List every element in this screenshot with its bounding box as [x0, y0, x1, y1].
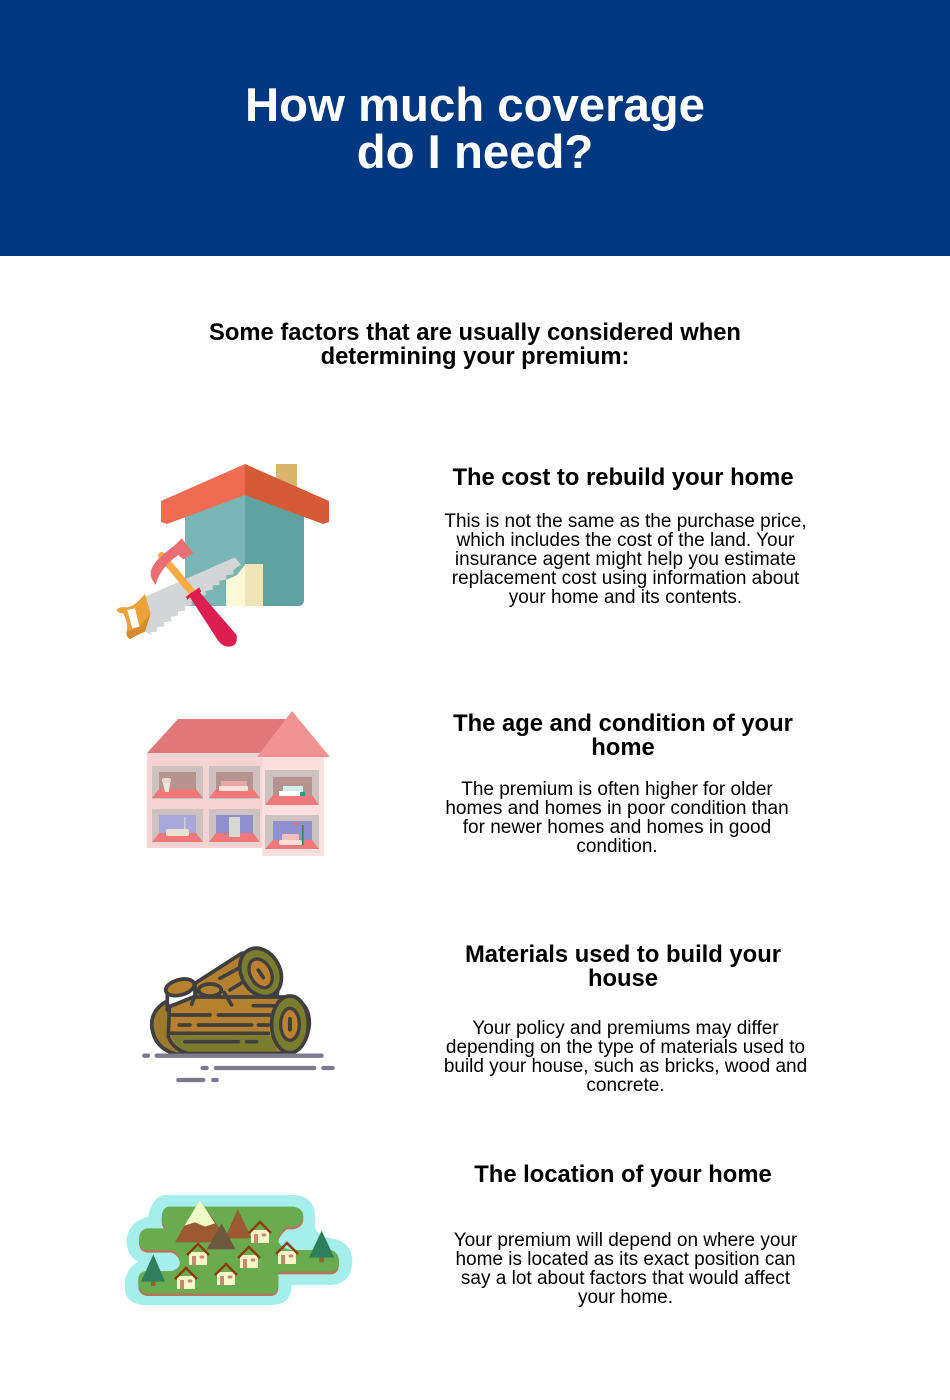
subheading — [209, 319, 741, 370]
factor 2 text: homes and homes in poor condition than — [445, 798, 789, 819]
factor 3 heading — [465, 941, 781, 992]
factor 3 heading: Materials used to build your — [465, 941, 781, 968]
header banner — [0, 0, 950, 256]
factor 1 text — [444, 511, 807, 608]
icon: wooden logs — [144, 941, 333, 1080]
factor 2 heading: home — [591, 734, 655, 761]
factor 2 text: condition. — [576, 836, 658, 857]
factor 1 text: your home and its contents. — [509, 587, 742, 608]
icon: house with hammer and saw — [117, 464, 329, 647]
subheading: determining your premium: — [321, 343, 629, 370]
factor 2 text — [445, 779, 789, 857]
subheading: Some factors that are usually considered when — [209, 319, 741, 346]
factor 2 heading — [453, 710, 793, 761]
icon: cutaway house with rooms — [147, 711, 330, 856]
factor 4 text — [454, 1230, 797, 1308]
factor 1 text: which includes the cost of the land. Your — [456, 530, 794, 551]
village houses — [175, 1222, 298, 1289]
factor 1 text: replacement cost using information about — [452, 568, 799, 589]
icon: island village — [125, 1195, 352, 1305]
factor 4 text: your home. — [578, 1287, 673, 1308]
factor 2 text: for newer homes and homes in good — [463, 817, 771, 838]
factor 4 text: Your premium will depend on where your — [454, 1230, 797, 1251]
factor 3 text: build your house, such as bricks, wood and — [444, 1056, 807, 1077]
factor 3 text: concrete. — [586, 1075, 665, 1096]
factor 4 heading: The location of your home — [474, 1161, 772, 1188]
factor 1 text: This is not the same as the purchase price, — [444, 511, 807, 532]
factor 3 text: depending on the type of materials used to — [446, 1037, 805, 1058]
title: How much coverage — [245, 79, 705, 132]
title: do I need? — [357, 126, 593, 179]
factor 3 text: Your policy and premiums may differ — [472, 1018, 779, 1039]
factor 2 text: The premium is often higher for older — [461, 779, 773, 800]
factor 4 text: say a lot about factors that would affect — [461, 1268, 790, 1289]
factor 4 text: home is located as its exact position can — [455, 1249, 796, 1270]
title — [245, 79, 705, 179]
factor 1 heading: The cost to rebuild your home — [452, 464, 794, 491]
factor 2 heading: The age and condition of your — [453, 710, 793, 737]
factor 1 text: insurance agent might help you estimate — [455, 549, 796, 570]
furniture — [162, 778, 305, 845]
factor 3 heading: house — [588, 965, 658, 992]
factor 3 text — [444, 1018, 807, 1096]
rooms — [152, 766, 319, 849]
